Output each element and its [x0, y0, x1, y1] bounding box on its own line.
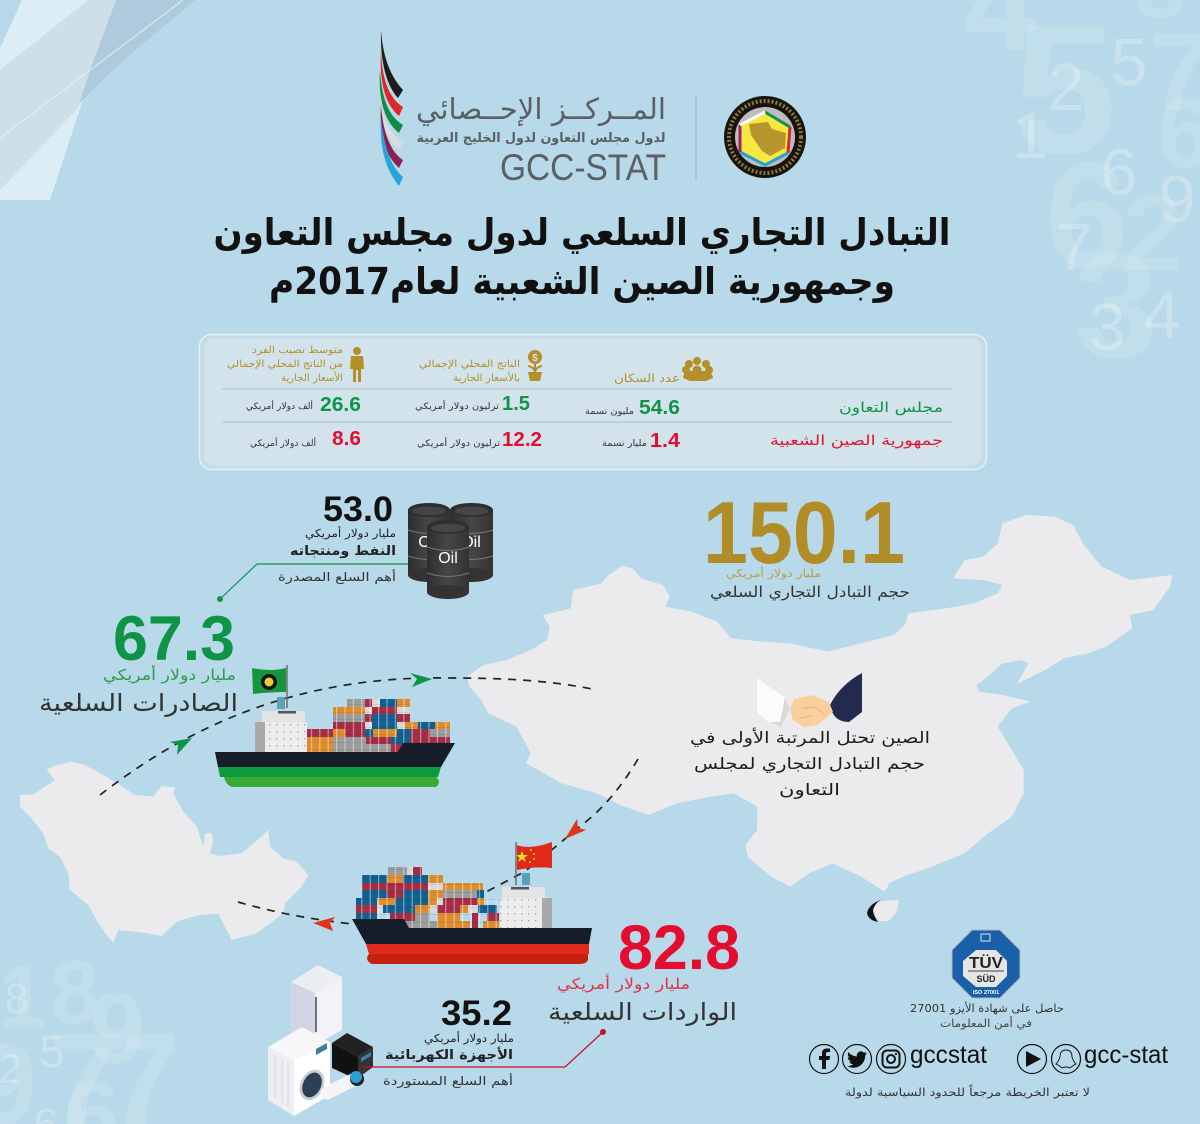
- ISO certification note: حاصل على شهادة الأيزو 27001: [910, 1001, 1064, 1015]
- row: GCC: مجلس التعاون: [839, 400, 943, 416]
- logo latin name: GCC-STAT: [500, 147, 666, 188]
- arrow: exports route: [100, 673, 597, 795]
- imports figure: 82.8: [618, 913, 740, 983]
- hull: [352, 919, 592, 964]
- row: GCC: مليون نسمة: [585, 407, 634, 417]
- row: China: ترليون دولار أمريكي: [417, 437, 501, 449]
- row: China: مليار نسمة: [602, 439, 647, 449]
- exports figure: [39, 604, 238, 717]
- handle: gcc-stat: [1084, 1041, 1168, 1069]
- top import callout: الأجهزة الكهربائية: [385, 1046, 513, 1063]
- row: GCC: [246, 393, 943, 419]
- containers: [356, 867, 499, 928]
- handle: gccstat: [910, 1041, 987, 1069]
- header: population: عدد السكان: [614, 371, 680, 385]
- imports figure: [548, 913, 740, 1026]
- top-left corner decoration: [0, 0, 196, 200]
- icon: people: [682, 357, 713, 381]
- header: GDP per capita: من الناتج المحلي الإجمالي: [227, 359, 343, 370]
- title: التبادل التجاري السلعي لدول مجلس التعاون: [214, 211, 950, 254]
- TÜV SÜD certification badge: ISO 27001: [973, 990, 999, 996]
- icon: youtube: [1018, 1044, 1046, 1074]
- icon: ribbons: [380, 30, 403, 186]
- fridge: [291, 965, 342, 1045]
- title: [214, 211, 950, 304]
- icon: twitter: [842, 1044, 872, 1074]
- row: GCC: 26.6: [320, 394, 361, 416]
- background numerals top right: 2: [1047, 50, 1085, 125]
- TÜV SÜD certification badge: TÜV: [969, 953, 1003, 972]
- exports figure: الصادرات السلعية: [39, 689, 238, 717]
- background numerals top right: 1: [1012, 99, 1048, 172]
- icon: instagram: [876, 1044, 906, 1074]
- header: population: [614, 357, 713, 385]
- header: GDP per capita: [227, 345, 364, 384]
- imports figure: الواردات السلعية: [548, 998, 737, 1026]
- top import callout: أهم السلع المستوردة: [383, 1073, 513, 1089]
- top import callout: مليار دولار أمريكي: [424, 1031, 514, 1045]
- background numerals bottom left: 8: [5, 975, 29, 1023]
- total trade figure: مليار دولار أمريكي: [726, 566, 821, 580]
- background numerals bottom left: 5: [39, 1026, 65, 1077]
- imports figure: مليار دولار أمريكي: [557, 974, 690, 994]
- background numerals bottom left: 8: [50, 943, 100, 1043]
- top export callout: النفط ومنتجاته: [290, 544, 396, 559]
- row: China: [250, 428, 943, 452]
- header: GDP per capita: متوسط نصيب الفرد: [252, 345, 343, 356]
- background numerals top right: 2: [1123, 172, 1183, 293]
- social media: gcc-stat: [1018, 1041, 1168, 1074]
- barrel right: Oil: [461, 534, 481, 551]
- background numerals top right: 7: [1055, 210, 1093, 285]
- total trade figure: حجم التبادل التجاري السلعي: [710, 583, 910, 602]
- total trade figure: 150.1: [703, 483, 905, 582]
- background numerals top right: 9: [1158, 162, 1196, 237]
- ship: exports (green): [215, 665, 455, 787]
- panel: comparison table: [200, 334, 986, 470]
- map: Arabian Peninsula GCC: [20, 762, 308, 943]
- icon: person: [350, 347, 364, 382]
- top import callout: [363, 994, 606, 1089]
- top export callout: [217, 490, 408, 602]
- row: China: 8.6: [332, 428, 361, 450]
- washing machine: [268, 1027, 330, 1116]
- background numerals top right: 5: [1110, 25, 1148, 100]
- barrel front: Oil: [438, 550, 458, 567]
- map disclaimer: لا تعتبر الخريطة مرجعاً للحدود السياسية لدولة: [845, 1084, 1090, 1099]
- icon: snapchat: [1052, 1044, 1080, 1074]
- row: China: ألف دولار أمريكي: [250, 437, 316, 449]
- superstructure: [255, 697, 307, 752]
- air conditioner: [327, 1071, 364, 1093]
- arrow: imports route from China: [484, 759, 638, 893]
- map: Hainan island: [867, 900, 898, 922]
- TÜV SÜD certification badge: SÜD: [976, 974, 996, 984]
- callout: China rank: التعاون: [779, 780, 840, 800]
- black box: [332, 1033, 373, 1080]
- ISO certification note: [910, 1001, 1064, 1030]
- row: GCC: ترليون دولار أمريكي: [415, 400, 500, 412]
- header: GDP: [419, 350, 542, 384]
- ISO certification note: في أمن المعلومات: [940, 1016, 1032, 1030]
- GCC-STAT logo: [380, 30, 666, 188]
- social media: gccstat: [810, 1041, 987, 1074]
- icon: handshake: [757, 673, 862, 727]
- logo subtitle: لدول مجلس التعاون لدول الخليج العربية: [416, 131, 666, 146]
- background numerals top right: 6: [1100, 135, 1138, 210]
- background numerals top right: [964, 0, 1200, 389]
- icon: home appliances: [268, 965, 373, 1116]
- icon: facebook: [810, 1044, 838, 1074]
- hull: [215, 743, 455, 787]
- logo Arabic name: المــركــز الإحــصائي: [416, 92, 666, 127]
- header: GDP: الناتج المحلي الإجمالي: [419, 359, 520, 370]
- top import callout: 35.2: [441, 994, 512, 1033]
- row: GCC: ألف دولار أمريكي: [246, 400, 313, 412]
- callout: China rank: [690, 727, 930, 800]
- arrow: imports route to GCC: [238, 902, 352, 931]
- background numerals bottom left: 9: [89, 973, 145, 1085]
- icon: money plant: $: [532, 353, 538, 364]
- map: China: [467, 515, 1172, 892]
- header: GDP: بالأسعار الجارية: [453, 371, 520, 384]
- ship: imports (red): [352, 842, 592, 964]
- flag: GCC: [252, 665, 287, 708]
- row: China: جمهورية الصين الشعبية: [770, 433, 943, 449]
- row: China: 12.2: [502, 429, 542, 451]
- top export callout: أهم السلع المصدرة: [278, 569, 396, 585]
- superstructure: [500, 873, 552, 928]
- background numerals bottom left: [0, 943, 180, 1124]
- flag: China: [516, 842, 552, 885]
- icon: oil barrels: [408, 503, 493, 599]
- background numerals top right: 4: [1143, 278, 1181, 353]
- background numerals top right: 3: [1088, 290, 1126, 365]
- title: وجمهورية الصين الشعبية لعام2017م: [269, 260, 895, 304]
- TÜV SÜD certification badge: [952, 930, 1020, 998]
- header: GDP per capita: الأسعار الجارية: [281, 371, 343, 384]
- row: GCC: 54.6: [639, 397, 680, 419]
- exports figure: 67.3: [113, 604, 235, 674]
- background numerals top right: 3: [1074, 221, 1158, 389]
- callout: China rank: حجم التبادل التجاري لمجلس: [694, 754, 925, 774]
- row: China: 1.4: [650, 430, 681, 452]
- top export callout: 53.0: [323, 490, 393, 529]
- callout: China rank: الصين تحتل المرتبة الأولى في: [690, 727, 930, 748]
- exports figure: مليار دولار أمريكي: [103, 665, 236, 685]
- barrel left: Oil: [418, 534, 438, 551]
- top export callout: مليار دولار أمريكي: [305, 526, 396, 540]
- background numerals top right: 6: [1045, 131, 1129, 299]
- icon: GCC emblem: [724, 96, 806, 178]
- containers: [307, 699, 450, 752]
- row: GCC: 1.5: [502, 393, 530, 415]
